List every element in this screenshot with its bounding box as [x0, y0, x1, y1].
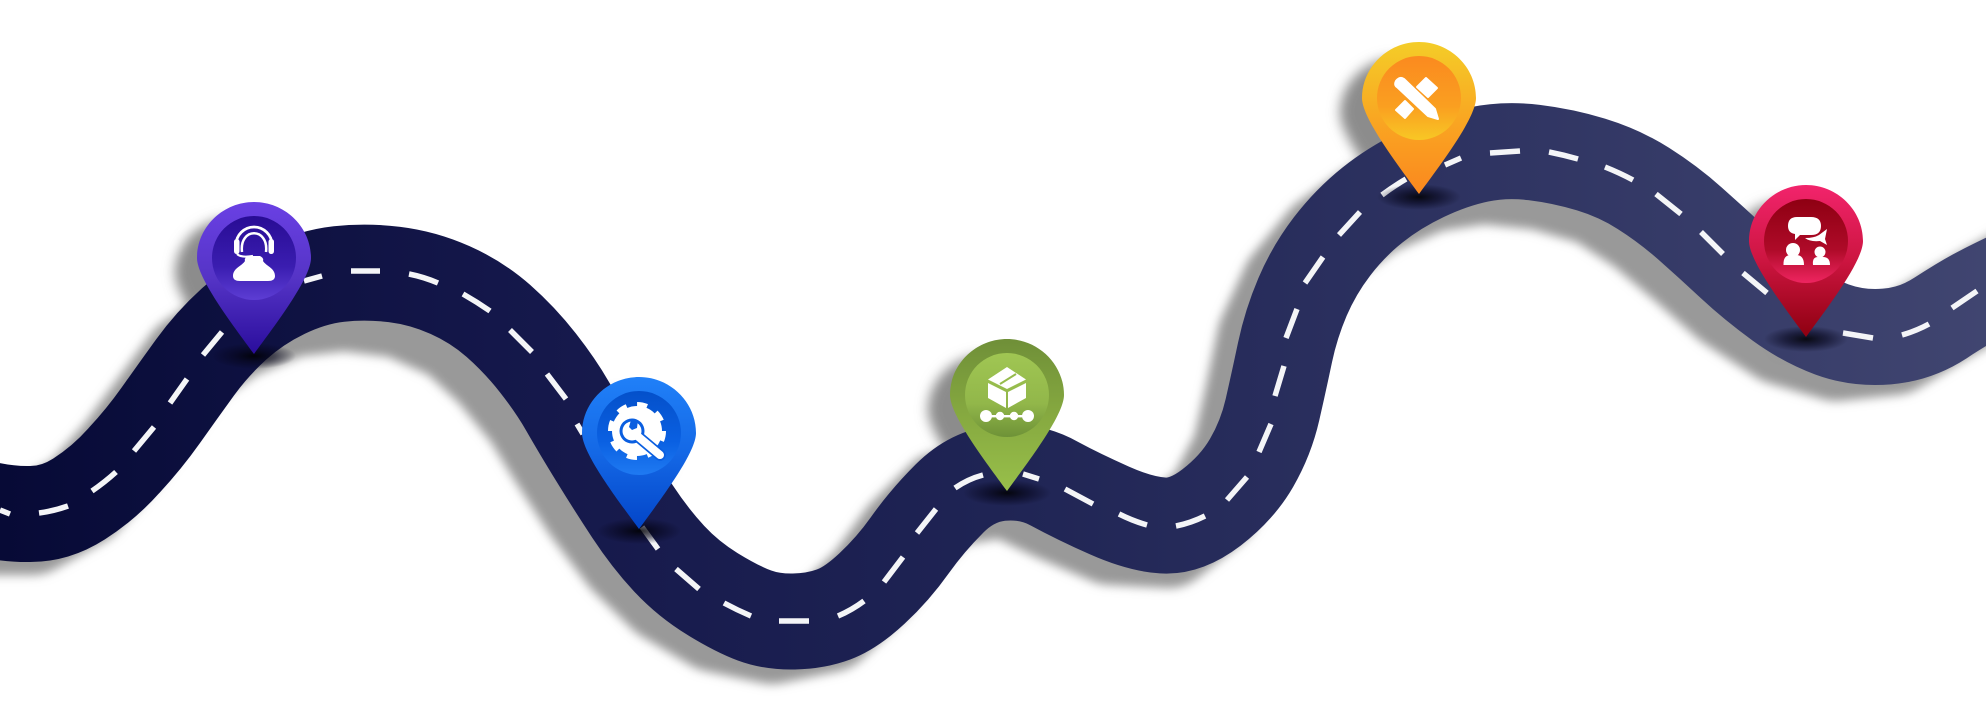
pin drop shadows	[175, 58, 1841, 545]
pin 5: crimson discussion	[1749, 185, 1863, 352]
pin 1 marker	[197, 202, 311, 354]
icon: gear and wrench	[611, 405, 663, 457]
icon: pencil and ruler	[1395, 78, 1438, 119]
icon: two people with speech bubbles	[1783, 217, 1830, 265]
pin 3: green package conveyor	[950, 339, 1064, 506]
road drop shadow	[0, 176, 1986, 636]
pin 4 marker	[1362, 42, 1476, 194]
pin 3 ground shadow	[963, 480, 1051, 506]
pin 5 ground shadow	[1764, 326, 1848, 352]
pin 4: orange design tools	[1362, 42, 1476, 210]
pin 5 marker	[1749, 185, 1863, 337]
road surface	[0, 151, 1986, 622]
pin 2 ground shadow	[597, 518, 681, 544]
pin 2: blue maintenance gear	[582, 377, 696, 544]
pin 4 ground shadow	[1377, 184, 1461, 210]
road centre dashes	[0, 151, 1977, 621]
icon: box on conveyor	[980, 367, 1034, 422]
pin 1: purple support headset	[197, 202, 311, 369]
pin 2 marker	[582, 377, 696, 529]
pin 3 marker	[950, 339, 1064, 491]
icon: headset person	[233, 227, 275, 281]
pin 1 ground shadow	[212, 343, 296, 369]
